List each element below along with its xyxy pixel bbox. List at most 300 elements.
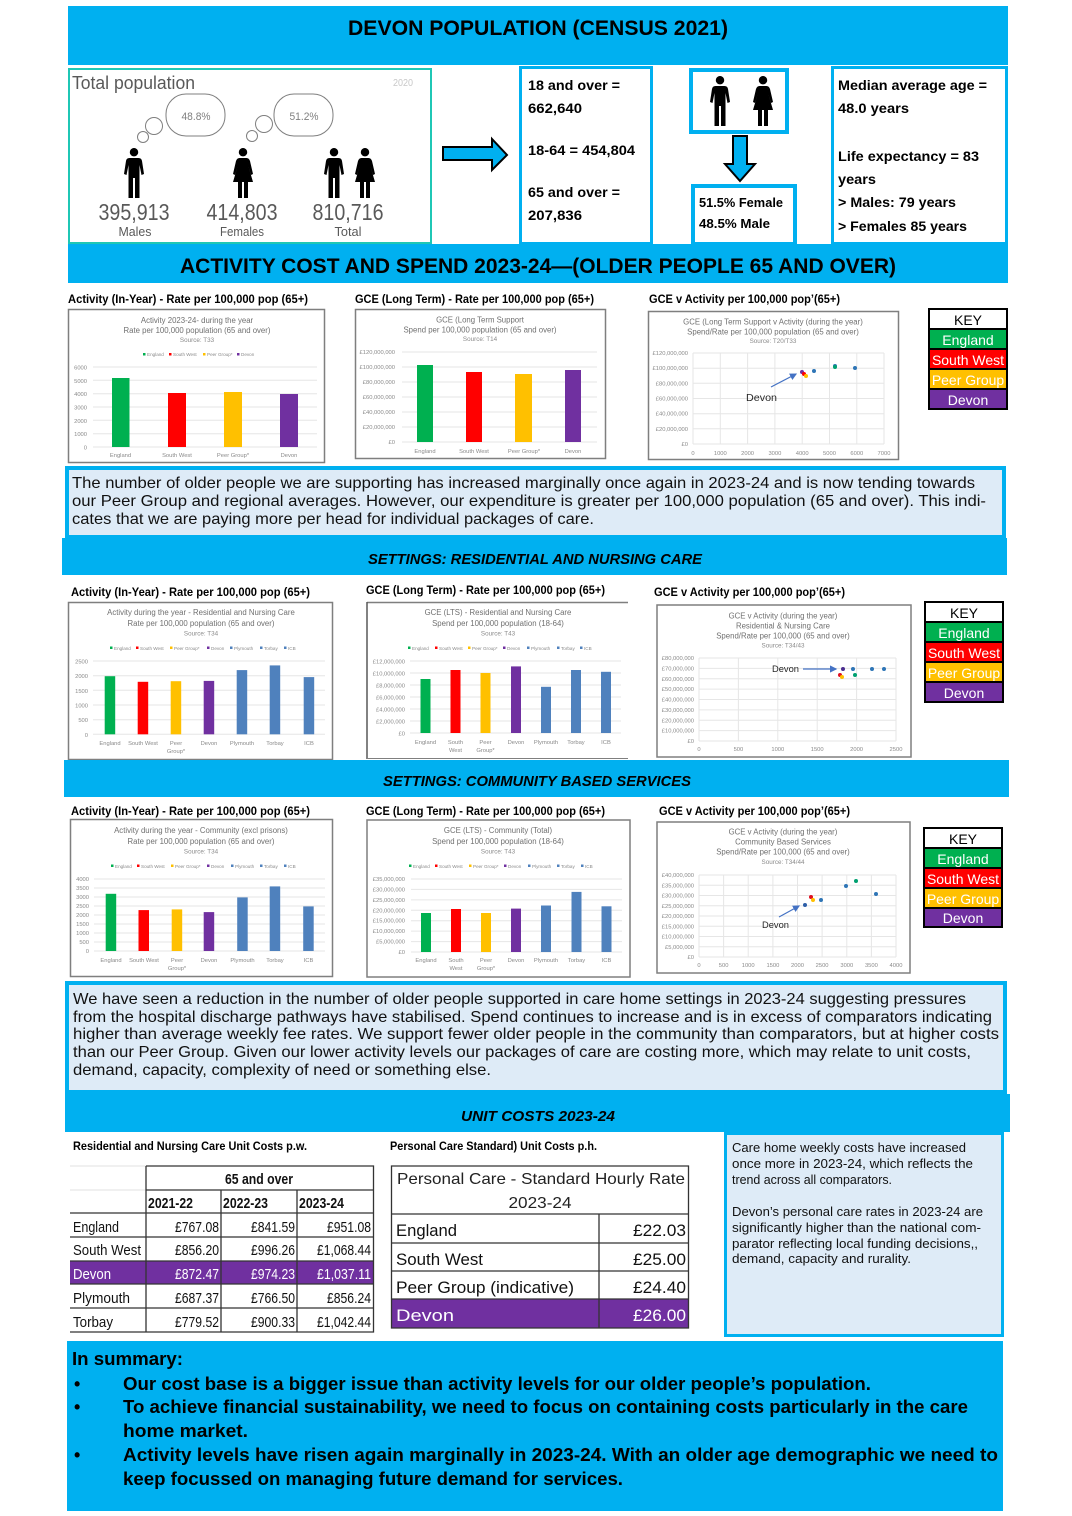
bar chart: community activity: Devon [211,864,225,869]
bar chart: residential spend: Devon [508,740,524,746]
summary bullet 2: • [74,1397,80,1417]
text box: unit cost commentary: Care home weekly costs have increased [732,1141,966,1155]
icon: male and female figures [324,148,375,198]
summary bullet 3: keep focussed on managing future demand for services. [123,1469,623,1489]
bar chart: residential activity: Activity during the year - Residential and Nursing Care [107,608,295,617]
bar chart: community activity: England [115,864,132,869]
scatter chart: community spend v activity: Spend/Rate per 100,000 (65 and over) [716,848,850,856]
section banner: residential and nursing care: SETTINGS: RESIDENTIAL AND NURSING CARE [368,551,703,568]
bar chart: residential activity [68,602,332,760]
text box: unit cost commentary: demand, capacity and rurality. [732,1252,911,1266]
bar chart: residential activity: Source: T34 [184,630,219,638]
text box: unit cost commentary [726,1134,1002,1336]
female count: Females [220,224,264,239]
chart heading: GCE (Long Term) - Rate per 100,000 pop (65+) [366,583,605,597]
bar chart: community spend: Plymouth [534,958,558,964]
bar chart: community spend: Torbay [561,864,575,869]
table: residential and nursing care unit costs: 2022-23 [223,1195,268,1212]
bar chart: community activity: South West [141,864,165,869]
bar chart: overall spend: England [414,449,436,455]
scatter chart: overall spend v activity: £60,000,000 [656,396,688,402]
bar chart: residential spend: GCE (LTS) - Residential and Nursing Care [425,608,571,617]
bar chart: residential activity: South West [140,646,164,651]
scatter chart: community spend v activity: £15,000,000 [662,924,694,930]
bar chart: overall activity: Activity 2023-24- during the year [141,316,254,325]
bar chart: community activity: Torbay [266,958,284,964]
scatter chart: community spend v activity: Devon [762,920,789,931]
bar chart: overall activity: 5000 [74,379,87,385]
scatter chart: community spend v activity: £20,000,000 [662,914,694,920]
bar chart: residential spend: Plymouth [534,740,558,746]
table: residential and nursing care unit costs: £974.23 [251,1266,295,1283]
bar chart: overall activity: South West [162,453,192,459]
chart heading: GCE v Activity per 100,000 pop’(65+) [649,292,840,306]
legend key [925,602,1003,702]
bar chart: residential activity: 1000 [75,704,88,710]
year label: 2020 [393,78,413,89]
bar chart: overall activity: England [110,453,131,459]
bar chart: overall spend: £80,000,000 [363,380,395,386]
icon: female figure [233,148,253,198]
bar chart: overall activity: Peer Group* [217,453,250,459]
bar chart: residential activity: England [114,646,131,651]
bar chart: residential spend: Peer [479,740,492,746]
scatter chart: community spend v activity: GCE v Activity (during the year) [729,828,838,836]
scatter chart: residential spend v activity: 2000 [850,747,863,753]
legend key: Peer Group [928,665,1000,681]
legend key: South West [927,871,999,887]
bar chart: residential spend: West [449,748,462,754]
total count: Total [334,224,362,239]
scatter chart: overall spend v activity: £0 [682,442,688,448]
scatter chart: residential spend v activity: £50,000,000 [662,687,694,693]
scatter chart: community spend v activity: £30,000,000 [662,894,694,900]
bar chart: residential activity: 1500 [75,689,88,695]
table: personal care hourly rate: 2023-24 [508,1195,572,1212]
scatter chart: residential spend v activity: £40,000,000 [662,698,694,704]
scatter chart: community spend v activity: £35,000,000 [662,883,694,889]
scatter chart: overall spend v activity: £100,000,000 [653,366,688,372]
summary bullet 2: home market. [123,1421,248,1441]
summary bullet 3: Activity levels have risen again marginally in 2023-24. With an older age demographic we need to [123,1445,998,1465]
bar chart: residential spend: £12,000,000 [373,660,405,666]
scatter chart: community spend v activity: £10,000,000 [662,934,694,940]
panel: median age and life expectancy: > Males: 79 years [838,194,956,210]
bar chart: community activity [70,820,332,976]
panel: gender split: 51.5% Female [699,195,783,210]
panel: age groups: 65 and over = [528,184,620,200]
legend key: South West [928,645,1000,661]
bar chart: overall spend: Source: T14 [463,336,498,343]
scatter chart: community spend v activity: Source: T34/44 [762,859,805,866]
scatter chart: overall spend v activity: Source: T20/T33 [750,338,797,345]
bar chart: residential activity: ICB [288,646,296,651]
summary bullet 3: • [74,1445,80,1465]
bar chart: residential activity: Torbay [266,741,284,747]
bar chart: residential spend: Group* [476,748,495,754]
arrow: down to gender split [725,136,755,181]
bar chart: residential spend: £4,000,000 [376,708,405,714]
legend key: England [938,625,990,641]
bar chart: community spend: GCE (LTS) - Community (Total) [444,826,552,835]
bar chart: community activity: England [100,958,122,964]
section banner: community based services: SETTINGS: COMMUNITY BASED SERVICES [383,773,691,790]
title banner: Devon population: DEVON POPULATION (CENSUS 2021) [348,17,728,40]
scatter chart: community spend v activity: 4000 [890,963,902,969]
scatter chart: residential spend v activity [657,605,911,757]
bar chart: residential activity: South West [128,741,158,747]
male count: Males [118,224,152,239]
bar chart: community spend: Peer [480,958,492,964]
bar chart: residential spend: £2,000,000 [376,720,405,726]
scatter chart: residential spend v activity: £0 [688,739,694,745]
scatter chart: overall spend v activity: Devon [746,392,777,404]
bar chart: overall activity: Devon [241,352,255,357]
scatter chart: overall spend v activity: £20,000,000 [656,427,688,433]
bar chart: community spend: South West [439,864,463,869]
bar chart: residential spend: South West [439,646,463,651]
scatter chart: residential spend v activity: £30,000,000 [662,708,694,714]
scatter chart: overall spend v activity: £120,000,000 [653,351,688,357]
text box: unit cost commentary: trend across all comparators. [732,1173,892,1187]
bar chart: community spend [367,820,630,977]
text block: settings commentary: We have seen a reduction in the number of older people supported in care home settings in 2023-24 suggesting pressures [73,991,966,1008]
bar chart: community activity: Plymouth [230,958,255,964]
bar chart: overall activity: Rate per 100,000 population (65 and over) [124,326,271,335]
bar chart: residential activity: Plymouth [234,646,254,651]
bar chart: residential activity: 2000 [75,674,88,680]
legend key: KEY [954,312,983,328]
chart heading: GCE v Activity per 100,000 pop’(65+) [654,585,845,599]
bar chart: community spend: Spend per 100,000 population (18-64) [432,837,564,846]
bar chart: residential activity: Plymouth [230,741,254,747]
table: personal care hourly rate: Peer Group (indicative) [396,1278,574,1297]
bar chart: community spend: England [413,864,430,869]
table: residential and nursing care unit costs: 2023-24 [299,1195,345,1212]
summary bullet 3 [74,1445,998,1489]
panel: gender split [693,186,795,244]
panel: age groups [520,68,652,244]
scatter chart: overall spend v activity [648,312,898,460]
female count [206,199,278,239]
bar chart: community spend: Torbay [568,958,585,964]
section banner: activity cost and spend: ACTIVITY COST AND SPEND 2023-24—(OLDER PEOPLE 65 AND OVER) [180,255,896,278]
scatter chart: community spend v activity: 2000 [791,963,804,969]
scatter chart: community spend v activity: £0 [688,955,694,961]
bar chart: community activity: 3000 [76,895,89,901]
scatter chart: residential spend v activity: Residential & Nursing Care [736,622,830,630]
legend key: KEY [949,831,978,847]
bar chart: overall spend [356,310,606,458]
bar chart: community activity: Group* [168,966,187,972]
scatter chart: community spend v activity: 1500 [766,963,779,969]
legend key: Devon [944,685,984,701]
bar chart: overall activity [68,310,324,462]
bar chart: community spend: £15,000,000 [373,919,405,925]
bar chart: overall activity: 6000 [74,366,87,372]
bar chart: community spend: £20,000,000 [373,908,405,914]
bar chart: community activity: ICB [304,958,313,964]
table: residential and nursing care unit costs: £1,068.44 [317,1242,371,1259]
scatter chart: community spend v activity: 1000 [742,963,755,969]
bar chart: residential activity: Peer Group* [174,646,200,651]
bar chart: overall spend: Spend per 100,000 population (65 and over) [403,326,557,334]
scatter chart: overall spend v activity: GCE (Long Term Support v Activity (during the year) [683,318,863,326]
title banner: Devon population [68,6,1008,65]
scatter chart: residential spend v activity: 1000 [771,747,784,753]
bar chart: overall spend: GCE (Long Term Support [436,316,525,324]
chart heading: GCE (Long Term) - Rate per 100,000 pop (65+) [355,292,594,306]
text block: overall commentary: The number of older people we are supporting has increased marginally once again in 2023-24 and is now tending towards [72,475,975,492]
bar chart: community spend: ICB [585,864,593,869]
legend key [924,828,1002,927]
scatter chart: residential spend v activity: £60,000,000 [662,677,694,683]
thought bubble: male share [138,94,225,142]
panel: in summary [67,1341,1003,1511]
scatter chart: community spend v activity: £25,000,000 [662,904,694,910]
scatter chart: community spend v activity: £5,000,000 [665,945,694,951]
bar chart: community spend: West [449,966,463,972]
bar chart: overall spend: Peer Group* [508,449,541,455]
summary bullet 1: • [74,1374,80,1394]
bar chart: community activity: Peer [171,958,183,964]
panel: age groups: 662,640 [528,100,582,116]
bar chart: residential activity: 500 [78,718,88,724]
table: residential and nursing care unit costs: Devon [73,1266,111,1283]
scatter chart: residential spend v activity: £10,000,000 [662,729,694,735]
table: personal care hourly rate: England [396,1221,457,1240]
bar chart: overall spend: £120,000,000 [360,350,395,356]
bar chart: residential spend: Plymouth [531,646,551,651]
male count [98,199,170,239]
scatter chart: residential spend v activity: £70,000,000 [662,666,694,672]
chart heading: GCE v Activity per 100,000 pop’(65+) [659,804,850,818]
panel: median age and life expectancy: Life expectancy = 83 [838,148,979,164]
bar chart: residential spend [367,602,628,759]
table: residential and nursing care unit costs: Torbay [73,1314,113,1331]
bar chart: community spend: £35,000,000 [373,877,405,883]
table: residential and nursing care unit costs: 2021-22 [148,1195,193,1212]
table heading: Personal Care Standard) Unit Costs p.h. [390,1141,597,1153]
bar chart: community spend: £10,000,000 [373,929,405,935]
bar chart: community spend: ICB [602,958,611,964]
scatter chart: community spend v activity: £40,000,000 [662,873,694,879]
section banner: community based services [64,760,1009,797]
text block: overall commentary: our Peer Group and regional averages. However, our expenditure is greater per 100,000 population (65 and over). This indi- [72,493,986,510]
chart heading: Activity (In-Year) - Rate per 100,000 pop (65+) [71,585,310,599]
legend key: Peer Group [932,372,1004,388]
bar chart: overall spend: £60,000,000 [363,395,395,401]
bar chart: community activity: Plymouth [235,864,255,869]
thought bubble: female share: 51.2% [290,111,319,123]
panel: median age and life expectancy [832,68,1006,244]
table: residential and nursing care unit costs: Plymouth [73,1290,130,1307]
text box: unit cost commentary: significantly higher than the national com- [732,1221,981,1235]
table: residential and nursing care unit costs: £951.08 [327,1219,371,1236]
bar chart: residential activity: Devon [211,646,225,651]
legend key: Devon [943,910,983,926]
table: residential and nursing care unit costs: £687.37 [175,1290,219,1307]
bar chart: overall spend: £20,000,000 [363,425,395,431]
bar chart: overall activity: 1000 [74,432,87,438]
text box: unit cost commentary: Devon’s personal care rates in 2023-24 are [732,1205,983,1219]
bar chart: residential activity: 0 [85,733,88,739]
panel heading: total population: Total population [72,73,195,93]
bar chart: overall activity: 3000 [74,406,87,412]
table: residential and nursing care unit costs: 65 and over [225,1171,293,1188]
text block: settings commentary: demand, capacity, complexity of need or something else. [73,1062,491,1079]
scatter chart: overall spend v activity: 3000 [768,451,781,457]
text block: settings commentary: higher than average weekly fee rates. We support fewer older people in the community than comparators, but at higher costs [73,1026,999,1043]
bar chart: community activity: ICB [288,864,296,869]
bar chart: overall spend: £0 [389,440,395,446]
scatter chart: community spend v activity: 3000 [840,963,853,969]
table heading: Residential and Nursing Care Unit Costs p.w. [73,1141,307,1153]
scatter chart: overall spend v activity: 7000 [878,451,890,457]
bar chart: community activity: 3500 [76,886,89,892]
text block: overall commentary: cates that we are paying more per head for individual packages of care. [72,511,594,528]
table: residential and nursing care unit costs: England [73,1219,119,1236]
legend key: South West [932,352,1004,368]
text block: settings commentary [67,983,1005,1092]
table: personal care hourly rate: Personal Care - Standard Hourly Rate [397,1171,685,1188]
bar chart: overall activity: Source: T33 [180,337,215,344]
legend key: England [942,332,994,348]
section banner: unit costs [65,1094,1010,1132]
text box: unit cost commentary: once more in 2023-24, which reflects the [732,1157,973,1171]
bar chart: overall spend: Devon [565,449,581,455]
chart heading: GCE (Long Term) - Rate per 100,000 pop (65+) [366,804,605,818]
table: residential and nursing care unit costs: £1,037.11 [317,1266,371,1283]
scatter chart: residential spend v activity: GCE v Activity (during the year) [729,612,838,620]
summary heading: In summary: [72,1349,183,1369]
bar chart: community spend: £30,000,000 [373,887,405,893]
scatter chart: overall spend v activity: 0 [691,451,695,457]
bar chart: residential spend: £6,000,000 [376,696,405,702]
bar chart: community activity: 1500 [76,922,89,928]
scatter chart: overall spend v activity: 2000 [741,451,754,457]
bar chart: residential spend: Torbay [567,740,585,746]
bar chart: community activity: 1000 [76,931,89,937]
section banner: activity cost and spend [68,244,1008,283]
bar chart: overall activity: England [147,352,164,357]
total count [312,199,384,239]
scatter chart: residential spend v activity: £20,000,000 [662,718,694,724]
bar chart: residential spend: Source: T43 [481,630,516,638]
bar chart: community spend: Plymouth [532,864,552,869]
legend key: Peer Group [927,891,999,907]
panel: age groups: 18-64 = 454,804 [528,142,635,158]
summary bullet 2 [74,1397,968,1441]
bar chart: residential activity: England [99,741,121,747]
bar chart: residential activity: Torbay [264,646,278,651]
section banner: unit costs: UNIT COSTS 2023-24 [461,1108,616,1125]
scatter chart: residential spend v activity: £80,000,000 [662,656,694,662]
bar chart: residential spend: ICB [601,740,611,746]
table: residential and nursing care unit costs: £841.59 [251,1219,295,1236]
bar chart: residential activity: Devon [201,741,217,747]
text box: unit cost commentary: parator reflecting local funding decisions,, [732,1237,978,1251]
panel: age groups: 207,836 [528,207,582,223]
scatter chart: overall spend v activity: 5000 [823,451,836,457]
table: residential and nursing care unit costs [70,1166,374,1332]
bar chart: overall activity: 0 [84,446,87,452]
table: residential and nursing care unit costs: £767.08 [175,1219,219,1236]
bar chart: community activity: 2500 [76,904,89,910]
bar chart: residential spend: Devon [507,646,521,651]
legend key: Devon [948,392,988,408]
scatter chart: residential spend v activity: Devon [772,664,799,675]
female count: 414,803 [206,199,278,225]
bar chart: overall activity: South West [173,352,197,357]
table: residential and nursing care unit costs: £779.52 [175,1314,219,1331]
scatter chart: residential spend v activity: 500 [734,747,743,753]
summary bullet 2: To achieve financial sustainability, we need to focus on containing costs particularly in the care [123,1397,968,1417]
bar chart: community spend: £5,000,000 [376,940,405,946]
bar chart: overall activity: Devon [281,453,297,459]
table: personal care hourly rate [392,1166,688,1328]
bar chart: community activity: Rate per 100,000 population (65 and over) [128,837,275,846]
bar chart: residential spend: Spend per 100,000 population (18-64) [432,619,564,628]
bar chart: community activity: 500 [79,940,89,946]
thought bubble: male share: 48.8% [182,111,211,123]
male count: 395,913 [98,199,170,225]
panel: median age and life expectancy: > Females 85 years [838,218,967,234]
chart heading: Activity (In-Year) - Rate per 100,000 pop (65+) [71,804,310,818]
total count: 810,716 [312,199,384,225]
bar chart: community activity: Peer Group* [175,864,201,869]
panel: gender split: 48.5% Male [699,216,770,231]
bar chart: residential spend: South [448,740,463,746]
table: personal care hourly rate: £25.00 [633,1250,686,1269]
scatter chart: community spend v activity: 0 [697,963,701,969]
table: residential and nursing care unit costs: £766.50 [251,1290,295,1307]
scatter chart: residential spend v activity: 2500 [890,747,902,753]
panel: median age and life expectancy: years [838,171,876,187]
panel: median age and life expectancy: 48.0 years [838,100,909,116]
bar chart: overall spend: South West [459,449,489,455]
bar chart: community activity: 4000 [76,877,89,883]
bar chart: community activity: 0 [86,949,89,955]
scatter chart: residential spend v activity: 1500 [811,747,824,753]
bar chart: overall activity: 4000 [74,392,87,398]
legend key: KEY [950,605,979,621]
scatter chart: community spend v activity: 2500 [816,963,829,969]
bar chart: residential spend: £8,000,000 [376,684,405,690]
bar chart: community activity: Devon [201,958,217,964]
bar chart: residential spend: Torbay [561,646,575,651]
bar chart: residential activity: ICB [304,741,314,747]
bar chart: community activity: Torbay [264,864,278,869]
bar chart: community activity: 2000 [76,913,89,919]
table: personal care hourly rate: £24.40 [633,1278,686,1297]
bar chart: community spend: £25,000,000 [373,898,405,904]
scatter chart: community spend v activity: 500 [719,963,728,969]
thought bubble: female share [246,94,333,142]
bar chart: overall spend: £40,000,000 [363,410,395,416]
bar chart: community spend: England [415,958,437,964]
summary bullet 1: Our cost base is a bigger issue than activity levels for our older people’s population. [123,1374,871,1394]
text block: settings commentary: than our Peer Group. Given our lower activity levels our packages of care are costing more, which may relate to unit costs, [73,1044,971,1061]
legend key: England [937,851,989,867]
bar chart: residential activity: Group* [167,749,186,755]
table: personal care hourly rate: £26.00 [633,1306,686,1325]
icon: male figure [124,148,144,198]
panel: age groups: 18 and over = [528,77,620,93]
table: residential and nursing care unit costs: £1,042.44 [317,1314,371,1331]
table: residential and nursing care unit costs: £996.26 [251,1242,295,1259]
scatter chart: residential spend v activity: Source: T34/43 [762,642,805,650]
